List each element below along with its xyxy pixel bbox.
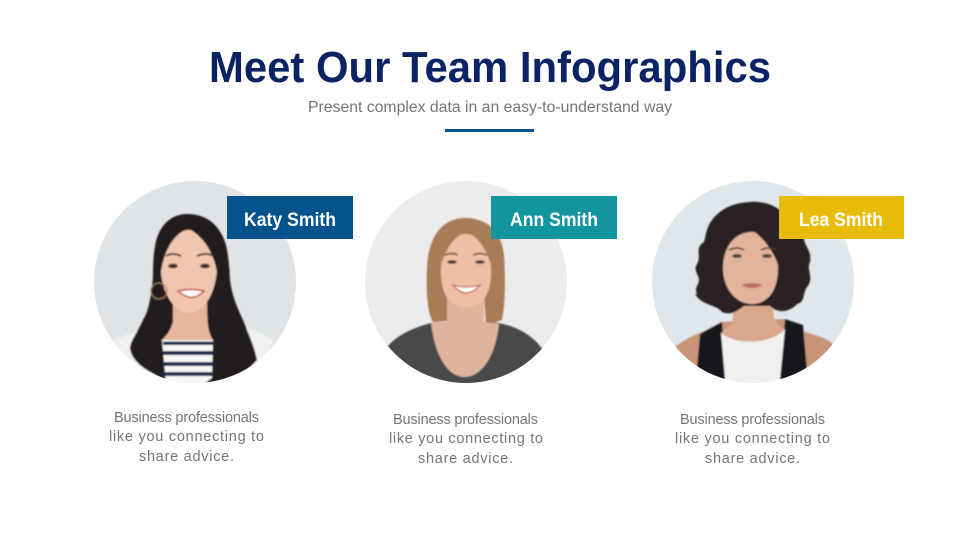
name tag: Ann Smith <box>491 196 617 239</box>
description: Katy Smith: like you connecting to <box>109 429 264 445</box>
title underline <box>445 129 534 132</box>
name tag: Katy Smith <box>227 196 353 239</box>
name tag: Lea Smith <box>779 196 904 239</box>
name tag: Lea Smith: Lea Smith <box>799 210 883 231</box>
title: Meet Our Team Infographics <box>209 43 771 92</box>
team member: Ann Smith <box>360 178 617 467</box>
description: Lea Smith: share advice. <box>705 451 800 467</box>
description: Ann Smith <box>389 412 543 467</box>
description: Lea Smith: like you connecting to <box>675 431 830 447</box>
subtitle: Present complex data in an easy-to-understand way <box>308 99 672 116</box>
description: Katy Smith: share advice. <box>139 449 234 465</box>
description: Katy Smith <box>109 410 264 465</box>
description: Lea Smith <box>675 412 830 467</box>
description: Ann Smith: like you connecting to <box>389 431 543 447</box>
portrait: Katy Smith <box>90 178 300 390</box>
description: Ann Smith: Business professionals <box>393 412 538 428</box>
name tag: Katy Smith: Katy Smith <box>244 210 336 231</box>
name tag: Ann Smith: Ann Smith <box>510 210 598 231</box>
team member: Lea Smith <box>648 178 904 467</box>
description: Lea Smith: Business professionals <box>680 412 825 428</box>
description: Katy Smith: Business professionals <box>114 410 259 426</box>
description: Ann Smith: share advice. <box>418 451 513 467</box>
team member: Katy Smith <box>90 178 353 465</box>
portrait: Ann Smith <box>360 178 572 390</box>
portrait: Lea Smith <box>648 178 860 390</box>
